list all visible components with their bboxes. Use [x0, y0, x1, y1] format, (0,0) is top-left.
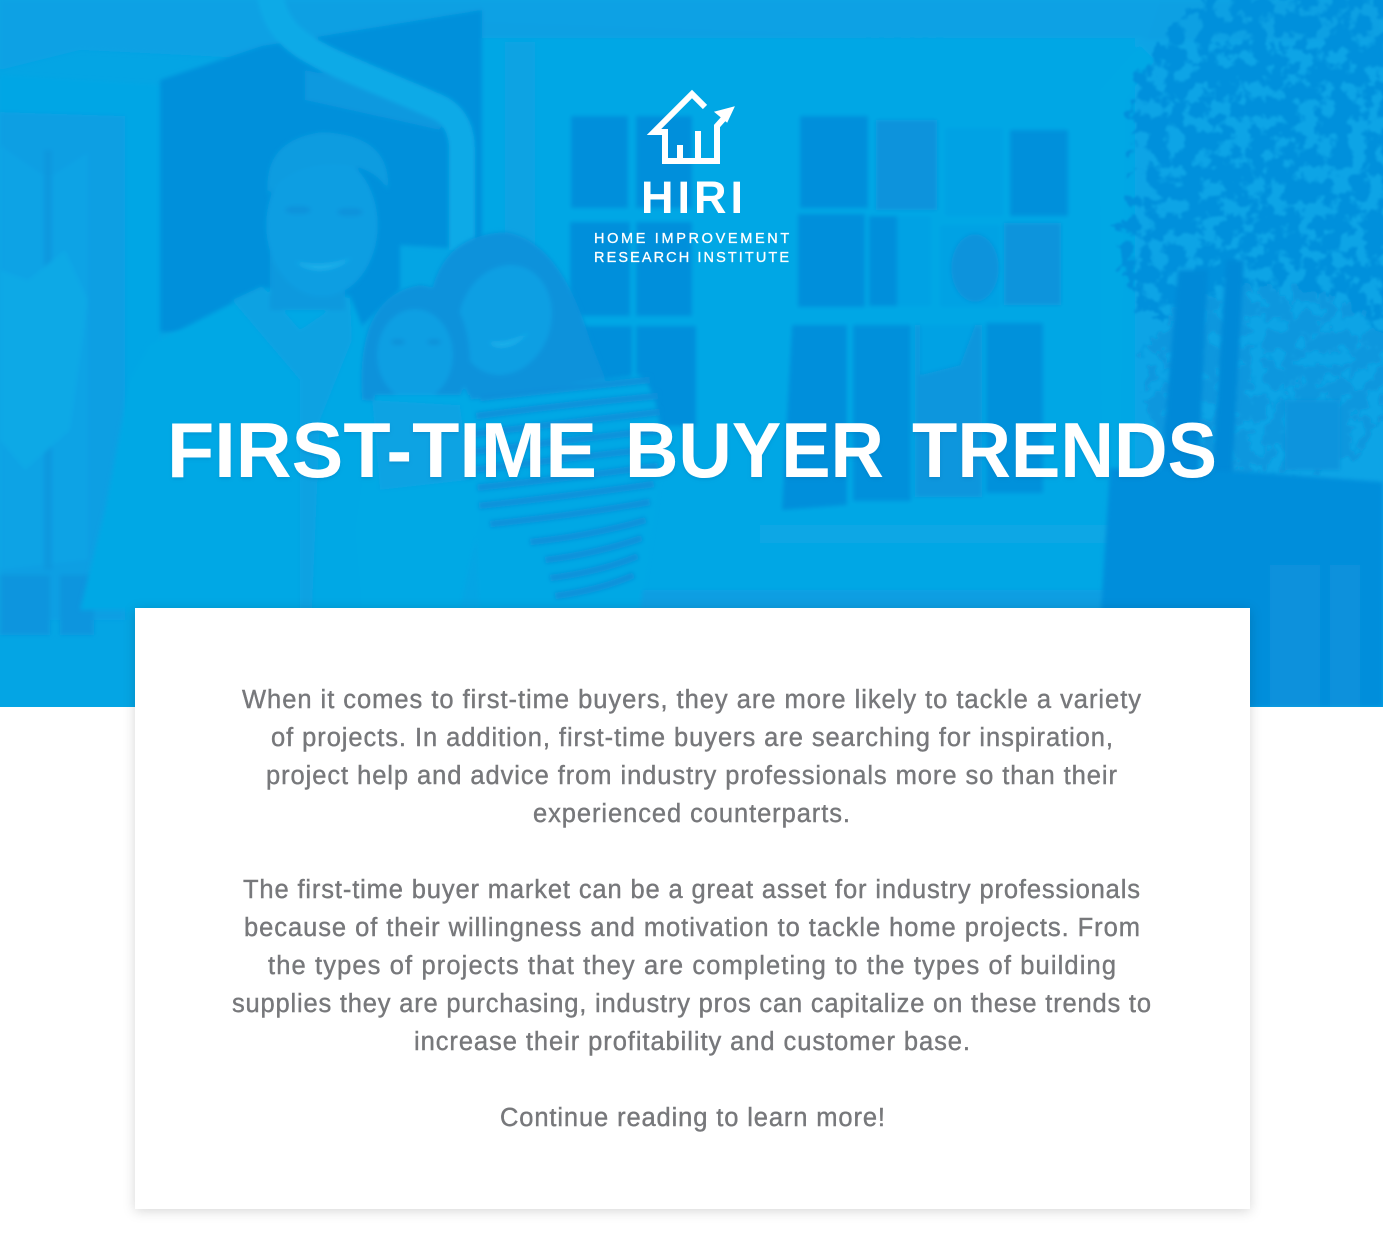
downspout pipe — [270, 0, 462, 250]
logo — [594, 94, 796, 266]
sill — [760, 525, 1130, 543]
hero photo with blue duotone — [0, 0, 1383, 707]
child — [360, 285, 482, 509]
text block: first paragraph: project help and advice from industry professionals more so than their — [266, 762, 1118, 790]
house wall — [482, 38, 1135, 44]
text block: second paragraph: The first-time buyer market can be a great asset for industry professionals — [243, 876, 1140, 904]
title: BUYER — [625, 406, 884, 494]
roof and eaves — [0, 0, 1383, 70]
title: TRENDS — [912, 406, 1217, 494]
logo tagline: RESEARCH INSTITUTE — [594, 250, 789, 266]
woman hair — [430, 232, 610, 400]
text block: second paragraph: increase their profitability and customer base. — [414, 1028, 970, 1056]
text block: second paragraph: supplies they are purchasing, industry pros can capitalize on these trends to — [232, 990, 1151, 1018]
sky and tree backdrop — [1135, 38, 1383, 478]
logo wordmark: HIRI — [641, 172, 743, 223]
text block: first paragraph — [242, 686, 1141, 828]
window panes left — [570, 116, 696, 426]
dark fence lower right — [1095, 468, 1383, 707]
woman striped shirt — [470, 375, 661, 608]
icon: house with rising chart arrow — [654, 94, 734, 161]
text block: first paragraph: experienced counterparts. — [533, 800, 850, 828]
man — [80, 132, 388, 610]
woman face — [461, 266, 551, 374]
logo tagline: HOME IMPROVEMENT — [594, 231, 789, 247]
text block: call to action: Continue reading to learn more! — [500, 1104, 885, 1132]
text block: first paragraph: of projects. In addition, first-time buyers are searching for inspiration, — [271, 724, 1113, 752]
tree foliage — [1120, 0, 1383, 475]
tree trunks — [1160, 260, 1340, 480]
panel: intro card — [135, 608, 1250, 1209]
text block: second paragraph: the types of projects that they are completing to the types of building — [268, 952, 1116, 980]
window panes right — [782, 116, 1068, 510]
text block: second paragraph — [232, 876, 1151, 1056]
text block: first paragraph: When it comes to first-time buyers, they are more likely to tackle a variety — [242, 686, 1141, 714]
text block: second paragraph: because of their willingness and motivation to tackle home projects. From — [244, 914, 1140, 942]
title: FIRST-TIME — [167, 406, 597, 494]
left window frame — [0, 75, 160, 635]
dark doorway behind family — [160, 10, 482, 332]
